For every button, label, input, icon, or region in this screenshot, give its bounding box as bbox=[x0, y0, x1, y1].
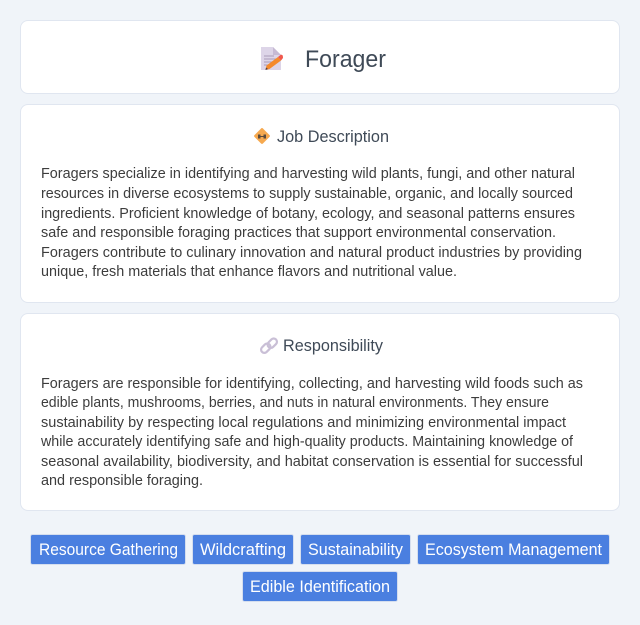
responsibility text: Foragers are responsible for identifying, collecting, and harvesting wild foods such as bbox=[41, 376, 583, 392]
tag: Edible Identification bbox=[242, 572, 398, 602]
tag: Resource Gathering: Resource Gathering bbox=[39, 541, 178, 559]
responsibility text: sustainability by respecting local regulations and minimizing environmental impact bbox=[41, 415, 566, 431]
panel: responsibility bbox=[20, 313, 620, 511]
tag: Edible Identification: Edible Identification bbox=[250, 578, 390, 596]
responsibility text: seasonal availability, biodiversity, and habitat conservation is essential for successful bbox=[41, 454, 583, 470]
responsibility text: and responsible foraging. bbox=[41, 473, 203, 489]
tag: Wildcrafting: Wildcrafting bbox=[200, 541, 286, 559]
job description text bbox=[41, 166, 582, 280]
title: Forager bbox=[305, 46, 386, 73]
tag: Wildcrafting bbox=[192, 534, 294, 564]
panel: job description bbox=[20, 104, 620, 303]
job description text: resources in diverse ecosystems to supply sustainable, organic, and locally sourced bbox=[41, 186, 573, 202]
tag: Ecosystem Management bbox=[418, 534, 610, 564]
job description text: Foragers specialize in identifying and harvesting wild plants, fungi, and other natural bbox=[41, 166, 575, 182]
panel: header bbox=[20, 20, 620, 94]
responsibility text bbox=[40, 376, 583, 489]
job description text: unique, fresh materials that enhance flavors and nutritional value. bbox=[41, 264, 457, 280]
job description text: safe and responsible foraging practices that support environmental conservation. bbox=[41, 225, 556, 241]
job description text: Foragers contribute to culinary innovation and natural product industries by providing bbox=[41, 245, 582, 261]
responsibility text: edible plants, mushrooms, berries, and nuts in natural environments. They ensure bbox=[41, 395, 549, 411]
tag: Sustainability bbox=[300, 534, 410, 564]
icon: document with pencil bbox=[261, 47, 283, 70]
heading: responsibility: Responsibility bbox=[283, 337, 384, 355]
tag: Resource Gathering bbox=[30, 534, 186, 564]
heading: job description: Job Description bbox=[277, 128, 389, 146]
responsibility text: while accurately identifying safe and high-quality products. Maintaining knowledge of bbox=[40, 434, 573, 450]
tag: Sustainability: Sustainability bbox=[308, 541, 404, 559]
icon: chain link bbox=[260, 337, 278, 354]
tag: Ecosystem Management: Ecosystem Management bbox=[425, 541, 602, 559]
job description text: ingredients. Proficient knowledge of botany, ecology, and seasonal patterns ensures bbox=[41, 206, 575, 222]
icon: orange diamond bbox=[254, 128, 270, 144]
